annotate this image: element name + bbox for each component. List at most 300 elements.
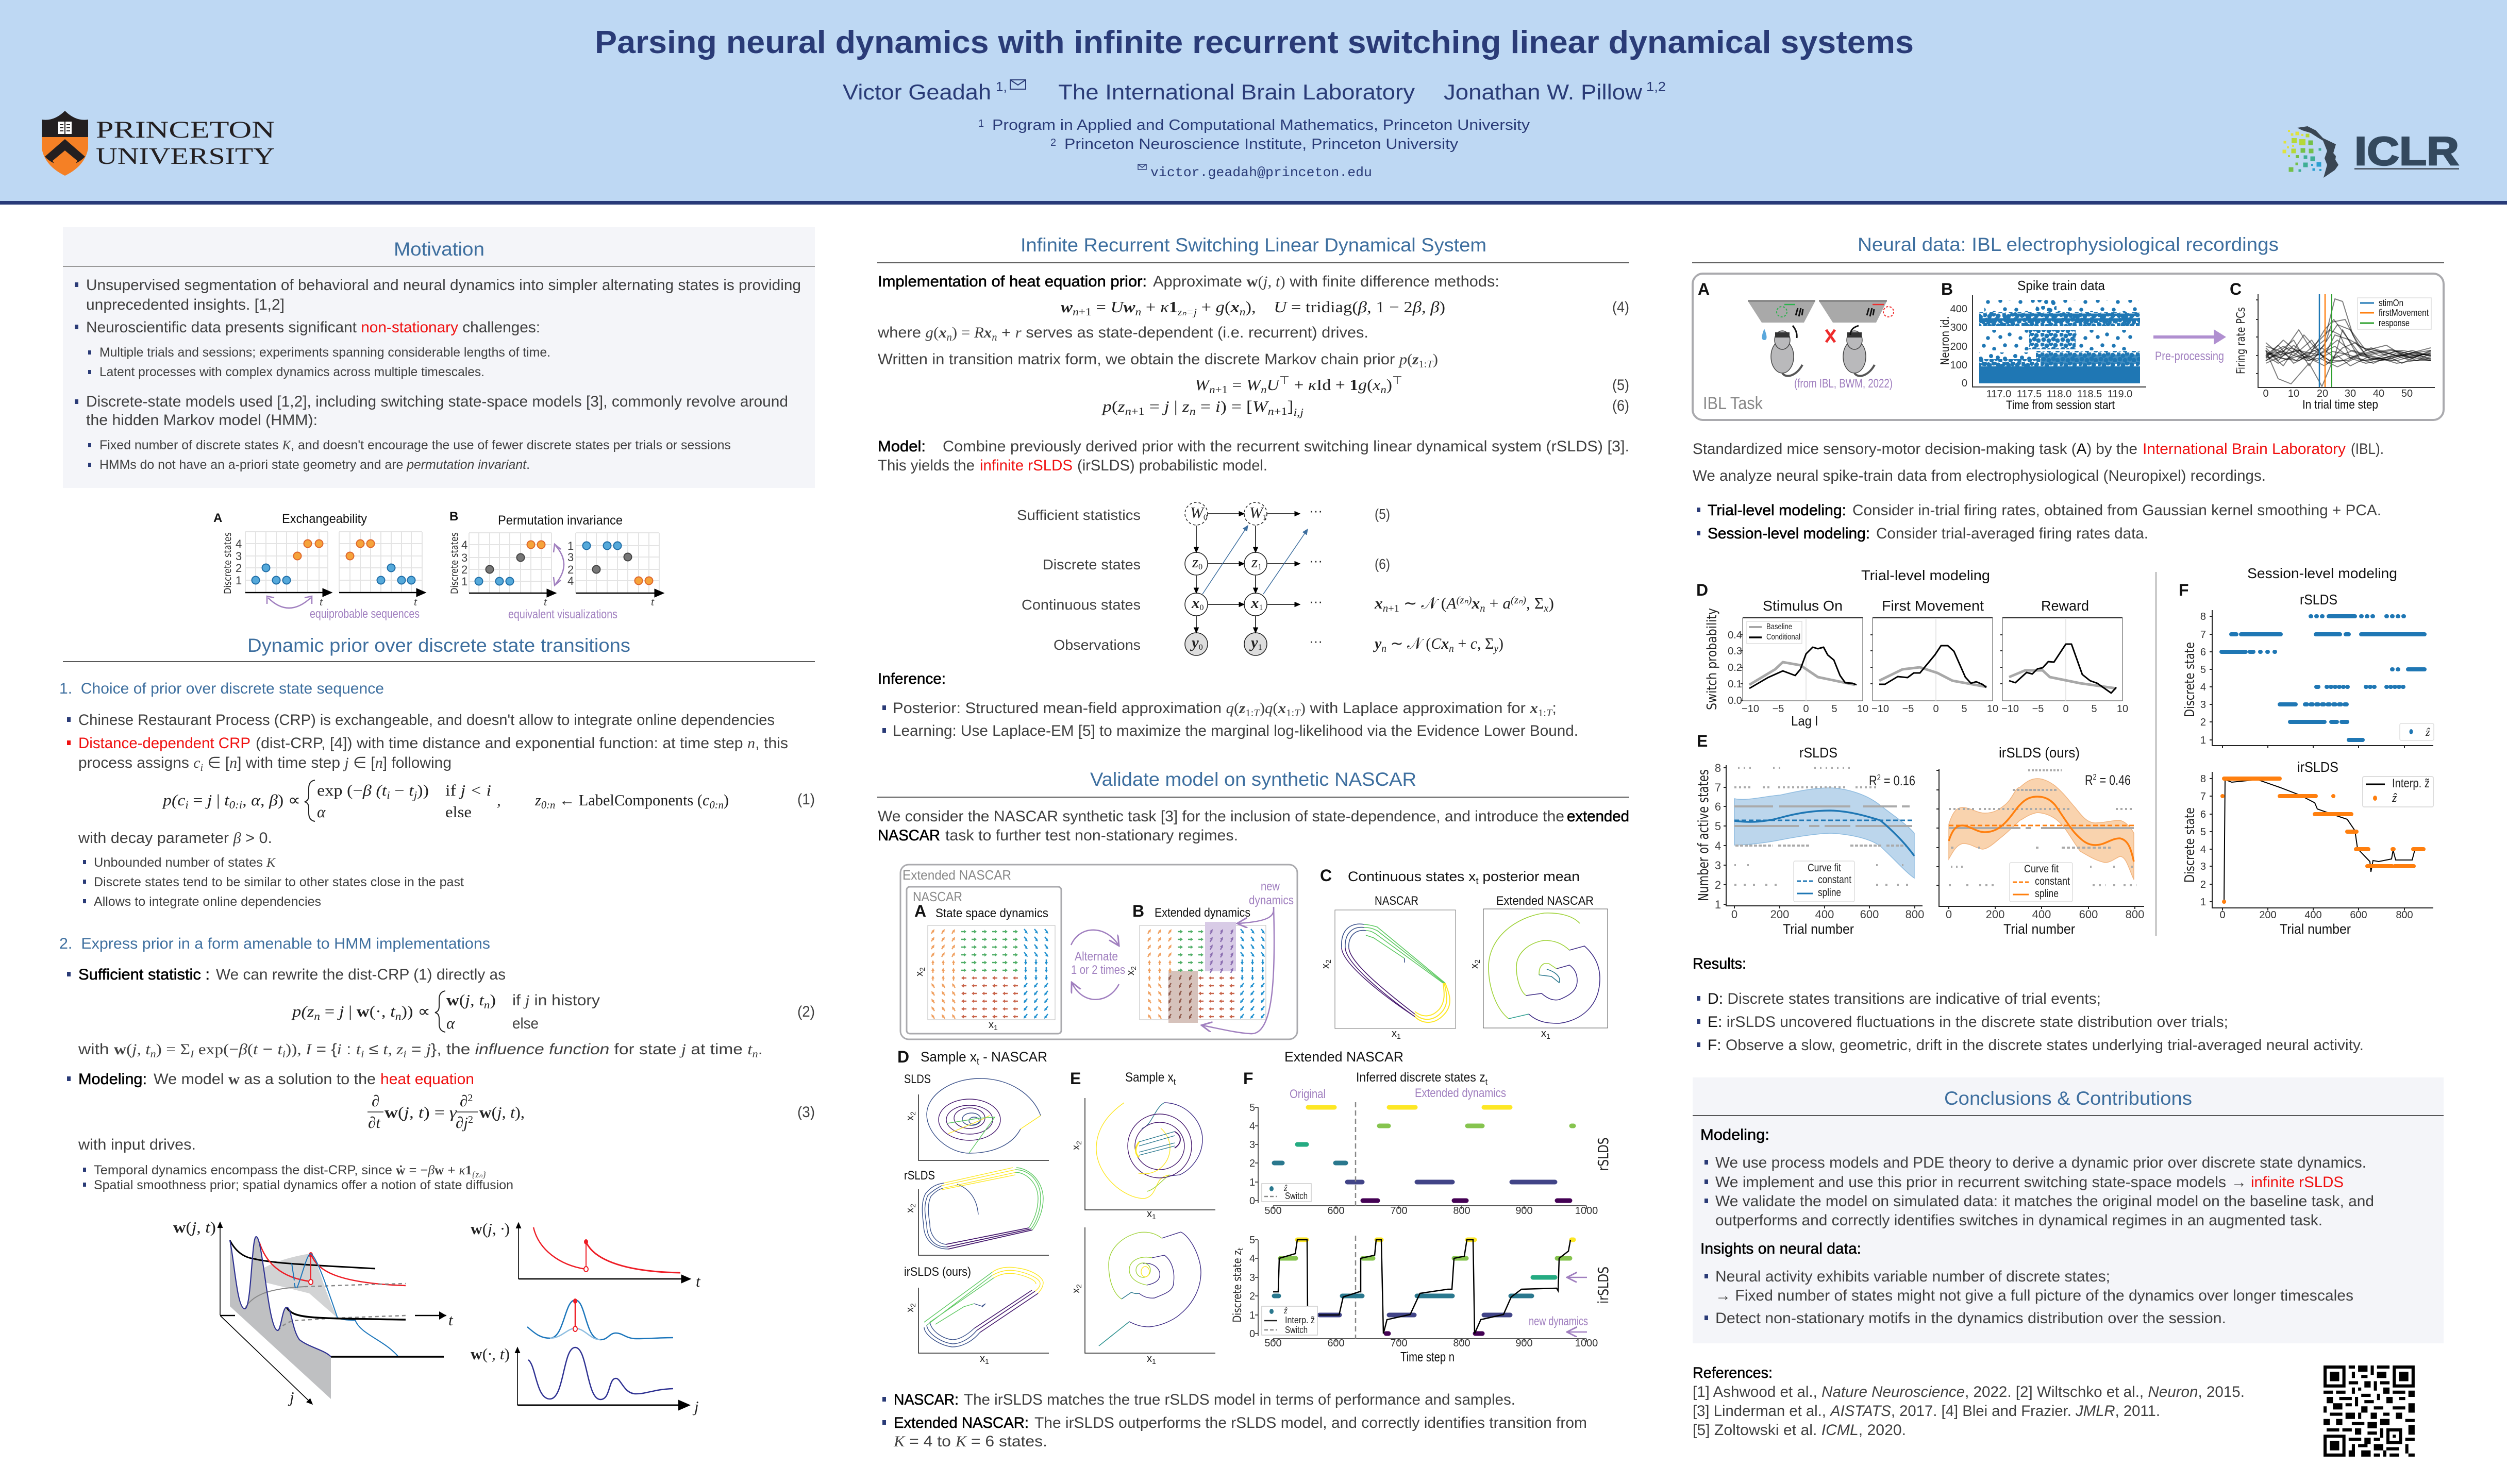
text block: NASCAR takeaways: NASCAR: xyxy=(894,1391,959,1408)
arrow: pre-processing: Pre-processing xyxy=(2155,349,2224,363)
chart F: rSLDS session states: 4 xyxy=(2200,682,2206,693)
equations 5 and 6: +1 xyxy=(1215,383,1228,396)
figure: permutation invariance: 1 xyxy=(567,539,574,552)
heading: Dynamic prior: Dynamic prior over discrete state transitions xyxy=(247,635,630,656)
chart F: irSLDS session states: Discrete state xyxy=(2182,807,2198,883)
figure: exchangeability: t xyxy=(414,595,417,608)
chart E: rSLDS number of active states: 2 xyxy=(1715,879,1721,891)
chart: F inferred discrete states rSLDS: 600 xyxy=(1327,1205,1345,1217)
chart: D samples NASCAR: 2 xyxy=(909,1303,917,1307)
chart B: spike train raster: 118.5 xyxy=(2077,389,2102,400)
chart: F inferred discrete states rSLDS: 500 xyxy=(1264,1205,1282,1217)
text block: CRP description: n] with time step j ∈ [n] following xyxy=(229,754,452,771)
diagram: graphical model: x xyxy=(1374,594,1383,612)
equation 1: = xyxy=(189,791,207,809)
text block: IBL description: Standardized mice sensory-motor decision-making task (A) by the xyxy=(1693,441,2137,458)
chart: D samples NASCAR: SLDS xyxy=(904,1072,931,1086)
chart C: firing rate PCs: In trial time step xyxy=(2302,398,2378,412)
equations 5 and 6: U xyxy=(1267,376,1281,394)
chart: D samples NASCAR: 2 xyxy=(909,1111,917,1116)
sub-panel: extended dynamics xyxy=(1125,880,1294,1034)
text block: motivation bullets xyxy=(86,277,801,472)
chart B: spike train raster: 0 xyxy=(1962,378,1967,389)
text block: influence function: t, z xyxy=(383,1041,404,1058)
text block: influence function: I xyxy=(190,1049,195,1060)
equations 5 and 6: n xyxy=(1190,405,1196,417)
diagram: graphical model: 0 xyxy=(1200,603,1204,612)
chart D: switch probability: −10 xyxy=(1742,703,1759,715)
chart: D samples NASCAR: t xyxy=(977,1056,979,1067)
text block: neural insights xyxy=(1700,1240,2353,1327)
chart: F inferred discrete states irSLDS: ẑ xyxy=(1283,1306,1288,1316)
chart D: switch probability: 0.3 xyxy=(1728,646,1742,657)
chart: F inferred discrete states rSLDS: t xyxy=(1485,1077,1488,1087)
chart D: switch probability: −5 xyxy=(2032,703,2044,715)
chart: F inferred discrete states irSLDS: Interp. z̃ xyxy=(1285,1315,1315,1325)
figure: exchangeability: A xyxy=(213,511,222,525)
diagram: graphical model: ··· xyxy=(1309,553,1323,568)
equations 5 and 6: n xyxy=(1209,383,1215,396)
text block: heat equation prior xyxy=(878,273,1499,290)
chart: F inferred discrete states rSLDS: Switch xyxy=(1285,1191,1308,1201)
chart D: switch probability: Stimulus On xyxy=(1763,598,1843,614)
chart: F inferred discrete states rSLDS: 4 xyxy=(1249,1121,1255,1132)
chart E: irSLDS number of active states: 800 xyxy=(2126,908,2144,921)
chart F: irSLDS session states: 1 xyxy=(2200,897,2206,908)
chart: E samples extended NASCAR: 1 xyxy=(1152,1212,1156,1221)
chart F: rSLDS session states: 8 xyxy=(2200,611,2206,622)
chart B: spike train raster: 117.5 xyxy=(2017,389,2042,400)
text block: decay parameter: Allows to integrate online dependencies xyxy=(94,895,321,909)
text block: sufficient statistic xyxy=(78,966,506,983)
figure: exchangeability: 1 xyxy=(236,574,242,587)
chart: E samples extended NASCAR: x xyxy=(1071,1145,1082,1150)
equation 1: if j < i xyxy=(445,781,491,799)
equation 4: w xyxy=(1061,298,1073,316)
chart E: rSLDS number of active states: 1 xyxy=(1715,898,1721,911)
diagram: graphical model: + xyxy=(1485,594,1502,612)
chart: C continuous state posterior means: 2 xyxy=(1473,959,1481,964)
chart D: switch probability: 0 xyxy=(2063,703,2069,715)
sub-panel: NASCAR state space: x xyxy=(914,971,925,976)
chart: C continuous state posterior means: 1 xyxy=(1397,1032,1401,1040)
diagram: graphical model: n xyxy=(1449,643,1454,654)
diagram: graphical model: ) xyxy=(1498,634,1503,652)
chart E: rSLDS number of active states xyxy=(1695,732,1924,937)
text block: modeling conclusions: We use process models and PDE theory to derive a dynamic prior over discrete state dynamics. xyxy=(1715,1154,2366,1171)
text block: CRP description: (dist-CRP, [4]) with time distance and exponential function: at time step n, this xyxy=(256,735,788,752)
figure: exchangeability: Discrete states xyxy=(222,532,233,594)
chart F: rSLDS session states: 2 xyxy=(2200,717,2206,728)
chart E: irSLDS number of active states: 0 xyxy=(1946,908,1952,921)
text block: references: [3] Linderman et al., AISTATS, 2017. [4] Blei and Frazier. JMLR, 2011. xyxy=(1693,1403,2160,1420)
chart B: spike train raster: 300 xyxy=(1950,322,1967,333)
logo: Princeton xyxy=(42,111,275,176)
equations 5 and 6: n xyxy=(1380,383,1386,396)
diagram: graphical model: x xyxy=(1471,594,1480,612)
chart D: switch probability: −10 xyxy=(1871,703,1889,715)
figure: permutation invariance: 3 xyxy=(461,551,467,564)
chart C: firing rate PCs xyxy=(2230,280,2435,412)
chart E: rSLDS number of active states: 7 xyxy=(1715,781,1721,794)
text block: neural insights: Insights on neural data: xyxy=(1700,1240,1861,1257)
diagram: graphical model: n xyxy=(1383,603,1388,614)
text block: input drives: Temporal dynamics encompass the dist-CRP, since ẇ = −βw + κ1 xyxy=(94,1163,472,1177)
text block: state-dependent drives: T xyxy=(1427,359,1434,370)
authors: 1,2 xyxy=(1646,79,1666,94)
text block: results: E: irSLDS uncovered fluctuations in the discrete state distribution over trials; xyxy=(1708,1014,2228,1031)
diagram: graphical model: 0 xyxy=(1198,563,1202,571)
chart: D samples NASCAR: x xyxy=(905,1307,916,1312)
chart: C continuous state posterior means: NASCAR xyxy=(1375,894,1418,908)
heading: Conclusions: Conclusions & Contributions xyxy=(1944,1088,2192,1109)
diagram: graphical model: y xyxy=(1493,643,1498,654)
text block: motivation bullets: Multiple trials and sessions; experiments spanning considerable lengths of time. xyxy=(99,345,550,360)
text block: state-dependent drives: n xyxy=(947,332,952,343)
chart: F inferred discrete states irSLDS: 500 xyxy=(1264,1338,1282,1349)
diagram: graphical model: a xyxy=(1502,594,1511,612)
chart D: switch probability: 10 xyxy=(2117,703,2128,715)
figure: permutation invariance xyxy=(449,510,663,621)
chart C: firing rate PCs: C xyxy=(2230,280,2242,298)
text block: references: [1] Ashwood et al., Nature Neuroscience, 2022. [2] Wiltschko et al., Neuron, 2015. xyxy=(1693,1384,2245,1401)
figure: exchangeability: equiprobable sequences xyxy=(310,607,420,621)
figure: permutation invariance: t xyxy=(544,595,547,608)
chart B: spike train raster: 100 xyxy=(1950,360,1967,371)
text block: inference xyxy=(878,670,1578,739)
equation 1: j xyxy=(412,789,417,801)
arrows: alternate xyxy=(1071,930,1125,1000)
equation 2: n xyxy=(484,999,490,1011)
affiliations: 1 xyxy=(978,118,984,129)
chart: F inferred discrete states irSLDS: 3 xyxy=(1249,1272,1255,1284)
chart E: rSLDS number of active states: = 0.16 xyxy=(1881,773,1915,788)
equation 1: j | t xyxy=(207,791,228,809)
equation 2: j | w(·, t xyxy=(339,1002,395,1020)
diagram: graphical model: y xyxy=(1373,634,1382,652)
text block: IBL description: (IBL). xyxy=(2351,441,2384,458)
sub-panel: NASCAR state space: 1 xyxy=(994,1023,998,1032)
equation 1: 0:i xyxy=(229,799,242,811)
text block: IBL description: International Brain Laboratory xyxy=(2143,441,2346,458)
text block: modeling conclusions: → xyxy=(2231,1174,2247,1191)
text block: modeling conclusions: Modeling: xyxy=(1700,1126,1769,1143)
legend: constant xyxy=(1818,874,1851,886)
title: Parsing neural dynamics with infinite recurrent switching linear dynamical systems xyxy=(595,25,1914,60)
sub-panel: extended dynamics: x xyxy=(1125,970,1136,975)
figure: permutation invariance: 4 xyxy=(461,538,467,551)
text block: CRP description xyxy=(78,712,788,773)
text block: inference: T xyxy=(1294,707,1301,719)
legend: firstMovement xyxy=(2379,308,2429,318)
equations 5 and 6 xyxy=(1101,374,1629,418)
equation 3: ∂ xyxy=(460,1092,467,1110)
equations 5 and 6: = xyxy=(1145,397,1164,415)
equation 1: ) xyxy=(724,791,729,809)
header banner xyxy=(0,0,2507,205)
figure A: IBL task mice xyxy=(1698,280,1894,413)
affiliations: Princeton Neuroscience Institute, Princeton University xyxy=(1064,136,1459,153)
text block: NASCAR intro: NASCAR xyxy=(878,827,940,844)
chart E: rSLDS number of active states: 2 xyxy=(1877,773,1881,782)
figure: permutation invariance: Permutation invariance xyxy=(498,513,623,528)
chart E: rSLDS number of active states: 0 xyxy=(1731,908,1737,921)
diagram: graphical model: c, Σ xyxy=(1470,634,1495,652)
text block: influence function: . xyxy=(758,1041,763,1058)
text block: neural insights: Detect non-stationary motifs in the dynamics distribution over the session. xyxy=(1715,1310,2226,1327)
text block: influence function: i xyxy=(361,1049,364,1060)
diagram: graphical model: ··· xyxy=(1309,594,1323,609)
text block: IBL description: Consider trial-averaged firing rates data. xyxy=(1876,525,2148,542)
text block: IBL description: Session-level modeling: xyxy=(1708,525,1870,542)
authors: 1, xyxy=(996,79,1007,94)
chart E: rSLDS number of active states: 200 xyxy=(1770,908,1789,921)
text block: sufficient statistic: Sufficient statistic : xyxy=(78,966,210,983)
text block: motivation bullets: Unsupervised segmentation of behavioral and neural dynamics into simpler alternating states is providing xyxy=(86,277,801,294)
legend xyxy=(1747,621,1802,644)
diagram: graphical model xyxy=(1017,502,1554,655)
chart F: irSLDS session states: irSLDS xyxy=(2297,759,2338,775)
legend: Curve fit xyxy=(2024,863,2059,875)
equation 4: + xyxy=(1141,298,1160,316)
chart D: switch probability: 0.4 xyxy=(1728,630,1742,641)
equations 5 and 6: κId + 1g(x xyxy=(1308,376,1380,394)
equation 4: +1 xyxy=(1079,306,1092,318)
text block: modeling: We model w as a solution to the xyxy=(154,1071,376,1088)
equation 1: , α, β xyxy=(242,791,278,809)
text block: state-dependent drives: Rx xyxy=(974,324,992,341)
chart B: spike train raster: 117.0 xyxy=(1986,389,2011,400)
diagram: graphical model: 1 xyxy=(1259,603,1263,612)
chart C: firing rate PCs: 10 xyxy=(2288,388,2299,399)
equations 5 and 6: W xyxy=(1246,376,1260,394)
text block: state-dependent drives: r serves as state-dependent (i.e. recurrent) drives. xyxy=(1015,324,1359,341)
text block: influence function: n xyxy=(753,1049,758,1060)
text block: inference: ; xyxy=(1552,700,1557,717)
legend: stimOn xyxy=(2379,298,2403,308)
chart B: spike train raster: Neuron id. xyxy=(1939,316,1952,365)
text block: inference: T xyxy=(1254,707,1261,719)
authors: The International Brain Laboratory xyxy=(1058,80,1415,104)
chart F: irSLDS session states: 0 xyxy=(2219,909,2226,921)
text block: IBL description: Consider in-trial firing rates, obtained from Gaussian kernel smoothing + PCA. xyxy=(1852,502,2381,519)
text block: motivation bullets: Fixed number of discrete states K, and doesn't encourage the use of fewer discrete states per trials or sessions xyxy=(99,438,731,452)
chart E: irSLDS number of active states: irSLDS (ours) xyxy=(1999,745,2080,761)
equation 2: n xyxy=(395,1010,402,1022)
equations 5 and 6: +1 xyxy=(1274,405,1288,417)
chart F: irSLDS session states: 4 xyxy=(2200,844,2206,855)
heading: trial-level modeling: Trial-level modeling xyxy=(1861,567,1990,583)
figure A: IBL task mice: IBL Task xyxy=(1703,394,1763,413)
chart C: firing rate PCs: 0 xyxy=(2263,388,2269,399)
chart B: spike train raster: 400 xyxy=(1950,303,1967,315)
figure: permutation invariance: 2 xyxy=(567,563,574,576)
text block: state-dependent drives: n xyxy=(992,332,997,343)
chart D: switch probability: First Movement xyxy=(1882,598,1984,614)
text block: influence function: = xyxy=(407,1041,426,1058)
logo: Princeton: UNIVERSITY xyxy=(96,143,275,169)
equation 1: 0:n xyxy=(541,799,555,811)
diagram: graphical model: n xyxy=(1381,643,1386,654)
equation 1: i xyxy=(185,799,189,811)
diagram: graphical model: , Σ xyxy=(1526,594,1544,612)
equation 3: (3) xyxy=(797,1104,815,1121)
equations 5 and 6: = xyxy=(1228,376,1246,394)
legend: response xyxy=(2379,318,2410,328)
text block: neural insights: Neural activity exhibits variable number of discrete states; xyxy=(1715,1268,2110,1285)
chart: C continuous state posterior means: posterior mean xyxy=(1479,869,1580,884)
sub-panel: extended dynamics: dynamics xyxy=(1249,893,1294,907)
chart D: switch probability: 0 xyxy=(1803,703,1809,715)
legend: ẑ xyxy=(2425,726,2430,738)
chart D: switch probability: −5 xyxy=(1773,703,1784,715)
equation 4: n xyxy=(1073,306,1079,318)
text block: NASCAR takeaways: K = 4 to K = 6 states. xyxy=(893,1433,1047,1450)
equation 1: , xyxy=(497,791,501,809)
figure: permutation invariance: equivalent visualizations xyxy=(508,608,617,621)
text block: modeling xyxy=(78,1071,474,1088)
text block: influence function: i xyxy=(403,1049,407,1060)
chart E: rSLDS number of active states: 800 xyxy=(1906,908,1924,921)
chart: w(j, .) red time trace: w(j, ·) xyxy=(471,1220,510,1238)
text block: results: F: Observe a slow, geometric, drift in the discrete states underlying trial-averaged neural activity. xyxy=(1708,1037,2364,1054)
equations 5 and 6: n xyxy=(1261,383,1267,396)
equations 5 and 6: n xyxy=(1268,405,1274,417)
chart: E samples extended NASCAR: Sample x xyxy=(1125,1070,1179,1085)
equations 5 and 6: + xyxy=(1290,376,1308,394)
panel: IBL data pipeline xyxy=(1693,274,2444,420)
chart F: irSLDS session states: 6 xyxy=(2200,809,2206,820)
diagram: graphical model: z xyxy=(1192,553,1198,571)
chart: C continuous state posterior means: 2 xyxy=(1324,959,1332,964)
text block: references: References: xyxy=(1693,1364,1773,1381)
figure: permutation invariance: t xyxy=(651,595,655,608)
equations 5 and 6: ) xyxy=(1386,376,1392,394)
text block: modeling: Modeling: xyxy=(78,1071,147,1088)
text block: references: [5] Zoltowski et al. ICML, 2020. xyxy=(1693,1422,1906,1439)
chart C: firing rate PCs: 50 xyxy=(2401,388,2413,399)
legend: spline xyxy=(2035,888,2059,900)
chart: F inferred discrete states rSLDS: rSLDS xyxy=(1595,1138,1612,1171)
diagram: graphical model: Sufficient statistics xyxy=(1017,507,1141,523)
text block: references xyxy=(1693,1364,2245,1439)
chart: F inferred discrete states irSLDS: 4 xyxy=(1249,1253,1255,1264)
text block: inference: Learning: Use Laplace-EM [5] to maximize the marginal log-likelihood via the Evidence Lower Bound. xyxy=(893,722,1578,739)
text block: CRP description: Distance-dependent CRP xyxy=(78,735,250,752)
authors xyxy=(843,79,1666,104)
equation 2 xyxy=(291,991,815,1032)
QR code xyxy=(2324,1365,2415,1457)
diagram: graphical model: (zₙ) xyxy=(1511,595,1526,606)
equation 1: )) xyxy=(417,781,429,799)
chart B: spike train raster: 119.0 xyxy=(2108,389,2132,400)
text block: model: infinite rSLDS xyxy=(980,457,1073,474)
chart: F inferred discrete states irSLDS: 2 xyxy=(1249,1291,1255,1302)
equations 5 and 6: ⊤ xyxy=(1392,374,1402,386)
chart: C continuous state posterior means: 1 xyxy=(1546,1032,1550,1040)
chart D: switch probability: 10 xyxy=(1987,703,1998,715)
diagram: graphical model: A xyxy=(1446,594,1456,612)
equation 2: ) xyxy=(490,991,496,1009)
text block: motivation bullets: unprecedented insights. [1,2] xyxy=(86,296,285,313)
chart: F inferred discrete states irSLDS: irSLDS xyxy=(1595,1267,1612,1304)
chart F: rSLDS session states xyxy=(2179,581,2434,748)
chart D: switch probability: Reward xyxy=(2041,598,2089,614)
equation 1: c xyxy=(703,791,710,809)
chart: F inferred discrete states irSLDS: Discrete state z xyxy=(1231,1234,1244,1322)
chart C: firing rate PCs: 20 xyxy=(2317,388,2328,399)
chart: D samples NASCAR: rSLDS xyxy=(904,1169,935,1183)
equation 1: − xyxy=(390,781,409,799)
equation 4: n xyxy=(1240,306,1245,318)
chart F: rSLDS session states: 5 xyxy=(2200,664,2206,676)
chart D: switch probability: 5 xyxy=(1961,703,1967,715)
chart F: irSLDS session states: 3 xyxy=(2200,861,2206,872)
chart D: switch probability: Lag l xyxy=(1791,713,1818,729)
chart: E samples extended NASCAR: t xyxy=(1174,1077,1176,1087)
chart: F inferred discrete states rSLDS: 2 xyxy=(1249,1158,1255,1169)
bullet markers xyxy=(67,972,86,1187)
chart E: rSLDS number of active states: 6 xyxy=(1715,800,1721,813)
chart: F inferred discrete states rSLDS: 5 xyxy=(1249,1102,1255,1114)
equation 2: n xyxy=(314,1010,320,1022)
chart E: rSLDS number of active states: 5 xyxy=(1715,820,1721,833)
diagram: graphical model: (5) xyxy=(1375,506,1390,522)
chart: F inferred discrete states irSLDS: 1000 xyxy=(1575,1338,1598,1349)
chart: blue state profile with update xyxy=(527,1298,673,1340)
text block: state-dependent drives: where g(x xyxy=(878,324,946,341)
chart D: switch probability: 0.1 xyxy=(1728,679,1742,690)
diagram: graphical model: y xyxy=(1190,633,1199,651)
bullet markers xyxy=(67,717,86,903)
chart: C continuous state posterior means: x xyxy=(1392,1028,1397,1039)
text block: NASCAR intro: We consider the NASCAR synthetic task [3] for the inclusion of state-dependence, and introduce the xyxy=(878,808,1564,825)
chart C: firing rate PCs: 30 xyxy=(2345,388,2356,399)
legend xyxy=(2363,777,2433,807)
text block: state-dependent drives: + xyxy=(997,324,1015,341)
chart: D samples NASCAR: - NASCAR xyxy=(979,1049,1047,1065)
chart: F inferred discrete states irSLDS: 900 xyxy=(1515,1338,1533,1349)
logo: ICLR: ICLR xyxy=(2354,128,2459,174)
equation 3: ∂ xyxy=(372,1092,379,1110)
equation 2: if j in history xyxy=(512,992,600,1009)
equation 4: + xyxy=(1197,298,1216,316)
diagram: graphical model: +1 xyxy=(1388,603,1399,614)
chart: w(., t) navy state profile: w(·, t) xyxy=(471,1345,510,1363)
text block: results: Results: xyxy=(1693,955,1746,972)
chart D: switch probability: 10 xyxy=(1857,703,1868,715)
text block: NASCAR intro: extended xyxy=(1567,808,1629,825)
text block: modeling conclusions: We implement and use this prior in recurrent switching state-space models xyxy=(1715,1174,2226,1191)
text block: modeling conclusions: outperforms and correctly identifies switches in dynamical regimes in an augmented task. xyxy=(1715,1212,2322,1229)
text block: IBL description xyxy=(1693,441,2384,542)
chart E: rSLDS number of active states: rSLDS xyxy=(1799,745,1837,761)
text block: CRP description: process assigns c xyxy=(78,754,200,771)
diagram: graphical model: n xyxy=(1480,603,1485,614)
equations 5 and 6: W xyxy=(1195,376,1208,394)
text block: inference: with Laplace approximation for x xyxy=(1310,700,1538,717)
figure: exchangeability xyxy=(213,511,425,621)
chart: 3D heat equation surface: j xyxy=(288,1388,294,1406)
equations 5 and 6: n xyxy=(1125,405,1131,417)
chart D: switch probability: −10 xyxy=(2001,703,2019,715)
legend: Interp. z̃ xyxy=(2392,777,2430,790)
text block: IBL description: Trial-level modeling: xyxy=(1708,502,1846,519)
chart: F inferred discrete states rSLDS: 1 xyxy=(1249,1177,1255,1188)
equations 5 and 6: ] xyxy=(1288,397,1293,415)
chart C: firing rate PCs: Firing rate PCs xyxy=(2235,307,2248,374)
chart D: switch probability: 0 xyxy=(1933,703,1939,715)
